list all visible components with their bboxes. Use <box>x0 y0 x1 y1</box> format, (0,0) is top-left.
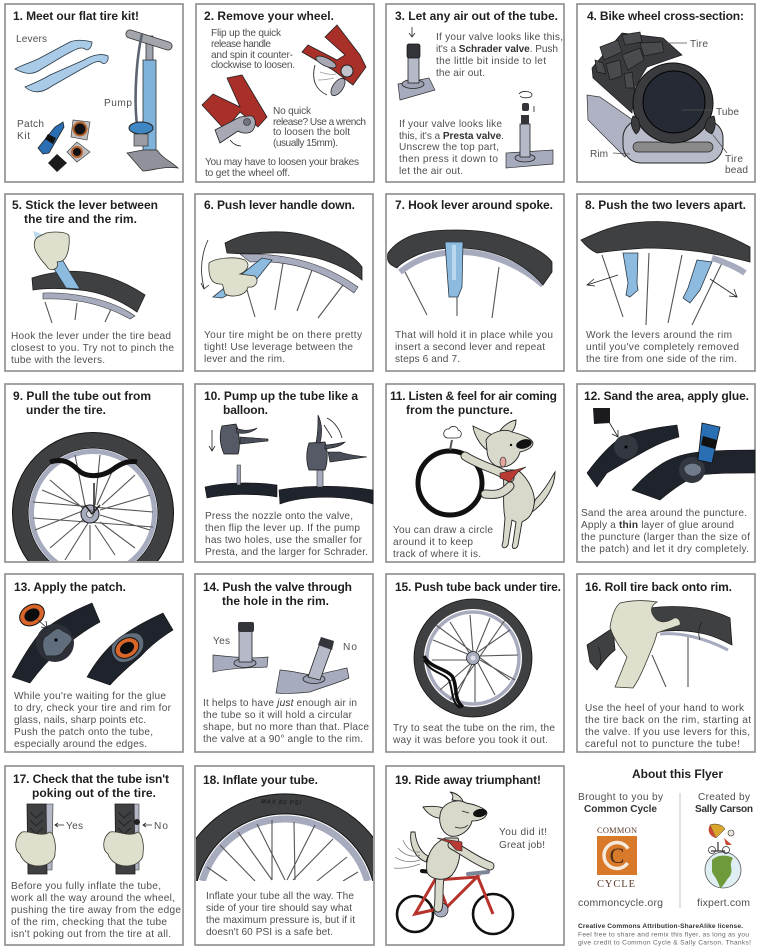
labels: tire parts <box>590 39 748 176</box>
text: step 16 <box>585 703 751 750</box>
panel: step 4 cross-section <box>577 4 755 182</box>
text: step 12 <box>581 508 750 555</box>
panel: step 5 stick lever <box>5 194 183 371</box>
text: step 11: You can draw a circle <box>393 525 493 536</box>
panel: step 18 inflate <box>194 765 375 946</box>
illustration: lever hooked on spoke <box>387 230 552 318</box>
panel: step 15 push tube back <box>386 574 564 752</box>
license note: Feel free to share and remix this flyer, as long as you <box>578 932 749 938</box>
text: step 18: the maximum pressure is, but if it <box>206 915 355 926</box>
title: step 14: 14. Push the valve through <box>203 580 352 594</box>
text: quick release: clockwise to loosen. <box>211 60 295 71</box>
text: wrench instructions: (usually 15mm). <box>273 138 338 149</box>
logo: common cycle: C <box>610 843 624 868</box>
panel: step 16 roll tire back <box>577 574 755 752</box>
text: step 13: Push the patch onto the tube, <box>14 727 153 738</box>
title: step 17: 17. Check that the tube isn't <box>13 772 169 786</box>
text: step 11: track of where it is. <box>393 549 481 560</box>
text: schrader: If your valve looks like this, <box>436 32 563 43</box>
credit: sally carson: Created by <box>698 792 751 803</box>
speech: you did it: You did it! <box>499 827 547 838</box>
text: step 17: isn't poking out from the tire at all. <box>11 929 171 940</box>
text: step 11 <box>393 525 493 560</box>
illustration: patch on tube <box>12 600 173 685</box>
logo: common cycle: COMMON <box>597 826 637 835</box>
title: step 16: 16. Roll tire back onto rim. <box>585 580 732 594</box>
illustration: valve yes and no <box>213 622 349 693</box>
panel: step 13 apply patch <box>5 574 183 752</box>
text: max pressure on tire: MAX 60 PSI <box>261 799 301 807</box>
title: step 17: poking out of the tire. <box>32 786 156 800</box>
logo: fixpert globe <box>705 824 741 888</box>
title: step 12: 12. Sand the area, apply glue. <box>584 389 749 403</box>
illustration: lever pushed <box>201 232 362 318</box>
text: step 17 <box>10 881 181 940</box>
text: step 5: closest to you. Try not to pinch the <box>11 343 174 354</box>
text: step 8: the tire from one side of the rim. <box>586 354 737 365</box>
title: step 9: 9. Pull the tube out from <box>13 389 151 403</box>
title: step 9: under the tire. <box>26 403 106 417</box>
icon: tire levers <box>15 40 108 92</box>
illustration: tire no <box>104 804 143 874</box>
labels: tire parts: Tire <box>725 154 743 165</box>
title: step 4: 4. Bike wheel cross-section: <box>587 9 744 23</box>
text: step 10: has two holes, use the smaller for <box>205 535 363 546</box>
labels: tire parts: Tube <box>716 107 739 118</box>
text: step 7: That will hold it in place while you <box>395 330 553 341</box>
text: brakes note: You may have to loosen your brakes <box>205 157 359 168</box>
text: presta: this, it's a Presta valve. <box>399 131 504 142</box>
label: yes: Yes <box>213 636 230 647</box>
panel: step 14 push valve <box>195 574 373 752</box>
title: step 5: the tire and the rim. <box>24 212 137 226</box>
text: step 12: the patch) and let it dry completely. <box>581 544 749 555</box>
panel: step 10 pump tube <box>195 384 373 562</box>
title: step 17 <box>13 772 169 800</box>
label: no arrow: No <box>154 821 168 832</box>
text: wrench instructions: No quick <box>273 106 312 117</box>
icon: schrader valve <box>398 27 435 100</box>
text: step 8: until you've completely removed <box>586 342 739 353</box>
text: step 6: lever and the rim. <box>204 354 285 365</box>
title: step 5 <box>12 198 158 226</box>
text: presta <box>399 119 504 177</box>
title: step 10 <box>204 389 358 417</box>
text: step 8: Work the levers around the rim <box>586 330 732 341</box>
text: step 7: steps 6 and 7. <box>395 354 460 365</box>
label: patch kit: Patch <box>17 119 44 130</box>
text: step 14: the tube so it will hold a circular <box>203 710 353 721</box>
text: step 16: the valve. If you use levers for this, <box>585 727 750 738</box>
icon: floor pump <box>127 34 178 171</box>
speech: you did it <box>499 827 547 851</box>
text: step 17: work all the way around the wheel, <box>10 893 175 904</box>
text: step 12: Apply a thin layer of glue around <box>581 520 734 531</box>
label: levers: Levers <box>16 34 47 45</box>
credit: common cycle: Common Cycle <box>584 804 657 815</box>
label: yes arrow: Yes <box>66 821 83 832</box>
text: wrench instructions <box>273 106 366 149</box>
text: step 14 <box>203 698 369 745</box>
text: step 12: the puncture (larger than the size of <box>581 532 750 543</box>
panel: step 3 let air out <box>386 4 564 182</box>
panel: step 6 push lever <box>195 194 373 371</box>
illustration: lever under tire <box>32 231 145 323</box>
icon: quick release fork <box>302 25 366 98</box>
text: step 10: then flip the lever up. If the pump <box>205 523 360 534</box>
text: step 18: side of your tire should say what <box>206 903 352 914</box>
illustration: wheel with tube pulled out <box>12 432 174 561</box>
credit: sally carson: Sally Carson <box>695 804 753 815</box>
heading: about: About this Flyer <box>632 767 723 781</box>
illustration: hand rolling tire <box>587 601 732 688</box>
panel: step 19 ride away <box>386 766 564 945</box>
title: step 14: the hole in the rim. <box>222 594 329 608</box>
illustration: wheel with tube at rim <box>414 599 532 717</box>
panel: step 1 kit <box>5 4 183 182</box>
title: step 6: 6. Push lever handle down. <box>204 198 355 212</box>
text: step 13: especially around the edges. <box>14 739 147 750</box>
title: step 19: 19. Ride away triumphant! <box>395 773 541 787</box>
license note: Creative Commons Attribution-ShareAlike license. <box>578 923 743 930</box>
link: fixpert url: fixpert.com <box>697 897 750 909</box>
label: kit: Kit <box>17 131 30 142</box>
text: step 18: Inflate your tube all the way. The <box>206 891 354 902</box>
text: step 17: Before you fully inflate the tube, <box>11 881 161 892</box>
title: step 9 <box>13 389 151 417</box>
link: common cycle url: commoncycle.org <box>578 897 663 909</box>
title: step 10: 10. Pump up the tube like a <box>204 389 358 403</box>
illustration: inflated wheel <box>196 793 373 881</box>
text: step 13: glass, nails, sharp points etc. <box>14 715 146 726</box>
text: step 13: to dry, check your tire and rim for <box>14 703 172 714</box>
panel: step 12 sand and glue <box>577 384 755 562</box>
panel: step 7 hook lever <box>386 194 564 371</box>
title: step 2: 2. Remove your wheel. <box>204 9 334 23</box>
text: step 7 <box>395 330 553 365</box>
title: step 3: 3. Let any air out of the tube. <box>395 9 558 23</box>
text: presta: If your valve looks like <box>399 119 502 130</box>
title: step 13: 13. Apply the patch. <box>14 580 126 594</box>
title: step 14 <box>203 580 352 608</box>
license note: give credit to Common Cycle & Sally Carson. Thanks! <box>578 940 751 946</box>
title: step 7: 7. Hook lever around spoke. <box>395 198 553 212</box>
panel: step 8 push apart <box>577 194 755 371</box>
text: step 6: Your tire might be on there pretty <box>204 330 363 341</box>
speech: you did it: Great job! <box>499 840 545 851</box>
illustration: pump nozzle on valve <box>205 415 373 504</box>
text: presta: Unscrew the top part, <box>399 142 499 153</box>
title: step 5: 5. Stick the lever between <box>12 198 158 212</box>
panel: about this flyer <box>578 767 753 946</box>
panel: step 9 pull tube <box>4 383 184 563</box>
icon: wheel cross-section <box>587 32 727 163</box>
text: brakes note: to get the wheel off. <box>205 168 290 179</box>
illustration: tire yes <box>16 804 55 874</box>
text: schrader <box>436 32 563 79</box>
text: step 10 <box>205 511 368 558</box>
labels: tire parts: Tire <box>690 39 708 50</box>
panel: step 11 listen <box>386 384 564 562</box>
icon: patch kit <box>38 120 90 172</box>
icon: wrench on bolt <box>202 75 267 146</box>
title: step 11 <box>390 389 557 417</box>
text: step 18 <box>206 891 355 938</box>
label: no arrow <box>143 821 168 832</box>
credit: common cycle <box>578 792 664 815</box>
title: step 15: 15. Push tube back under tire. <box>395 580 561 594</box>
text: step 5: tube with the levers. <box>11 355 105 366</box>
text: step 15 <box>392 723 555 746</box>
title: step 18: 18. Inflate your tube. <box>203 773 318 787</box>
text: quick release: Flip up the quick <box>211 28 282 39</box>
credit: common cycle: Brought to you by <box>578 792 664 803</box>
license note <box>578 923 751 946</box>
credit: sally carson <box>695 792 753 815</box>
text: step 17: of the rim, checking that the tube <box>11 917 167 928</box>
text: step 8 <box>586 330 739 365</box>
text: schrader: the air out. <box>436 68 485 79</box>
label: yes arrow <box>55 821 83 832</box>
text: quick release: release handle <box>211 39 271 50</box>
text: step 6 <box>204 330 363 365</box>
labels: tire parts: bead <box>725 165 748 176</box>
text: step 6: tight! Use leverage between the <box>204 342 353 353</box>
text: presta: let the air out. <box>399 166 463 177</box>
text: quick release <box>211 28 295 71</box>
text: schrader: it's a Schrader valve. Push <box>436 44 558 55</box>
text: step 13 <box>14 691 172 750</box>
text: step 14: It helps to have just enough air in <box>203 698 357 709</box>
text: step 14: the valve at a 90° angle to the rim. <box>203 734 363 745</box>
icon: presta valve <box>506 91 553 168</box>
text: step 17: pushing the tire away from the edge <box>11 905 181 916</box>
illustration: dog on bicycle <box>394 792 513 934</box>
text: step 14: shape, but no more than that. Place <box>203 722 369 733</box>
text: step 10: Press the nozzle onto the valve, <box>205 511 353 522</box>
text: step 5: Hook the lever under the tire bead <box>11 331 171 342</box>
labels: tire parts: Rim <box>590 149 608 160</box>
text: schrader: the little bit inside to let <box>436 56 546 67</box>
logo: common cycle: CYCLE <box>597 879 635 890</box>
text: step 13: While you're waiting for the glue <box>14 691 166 702</box>
text: step 12: Sand the area around the puncture. <box>581 508 747 519</box>
text: wrench instructions: release? Use a wrench <box>273 117 366 128</box>
text: step 15: way it was before you took it out. <box>392 735 548 746</box>
text: presta: then press it down to <box>399 154 498 165</box>
text: brakes note <box>205 157 359 179</box>
illustration: levers apart <box>581 222 750 325</box>
text: step 5 <box>11 331 174 366</box>
panel: step 2 remove wheel <box>196 4 374 182</box>
panel: step 17 check tube <box>5 766 183 945</box>
text: step 10: Presta, and the larger for Schrader. <box>205 547 368 558</box>
text: quick release: and spin it counter- <box>211 50 293 61</box>
text: step 15: Try to seat the tube on the rim, the <box>393 723 555 734</box>
text: wrench instructions: to loosen the bolt <box>273 127 350 138</box>
logo: common cycle <box>597 826 637 890</box>
title: step 11: 11. Listen & feel for air coming <box>390 389 557 403</box>
illustration: sanding and glue <box>587 408 755 500</box>
title: step 1: 1. Meet our flat tire kit! <box>13 9 139 23</box>
label: no: No <box>343 642 357 653</box>
illustration: dog holding tube <box>418 420 555 549</box>
title: step 8: 8. Push the two levers apart. <box>585 198 746 212</box>
text: step 18: doesn't 60 PSI is a safe bet. <box>206 927 333 938</box>
label: pump: Pump <box>104 98 132 109</box>
text: step 11: around it to keep <box>393 537 473 548</box>
text: step 16: careful not to puncture the tube! <box>585 739 740 750</box>
text: step 16: the tire back on the rim, starting at <box>585 715 751 726</box>
text: step 16: Use the heel of your hand to work <box>585 703 745 714</box>
text: step 7: insert a second lever and repeat <box>395 342 545 353</box>
title: step 11: from the puncture. <box>406 403 513 417</box>
title: step 10: balloon. <box>223 403 268 417</box>
